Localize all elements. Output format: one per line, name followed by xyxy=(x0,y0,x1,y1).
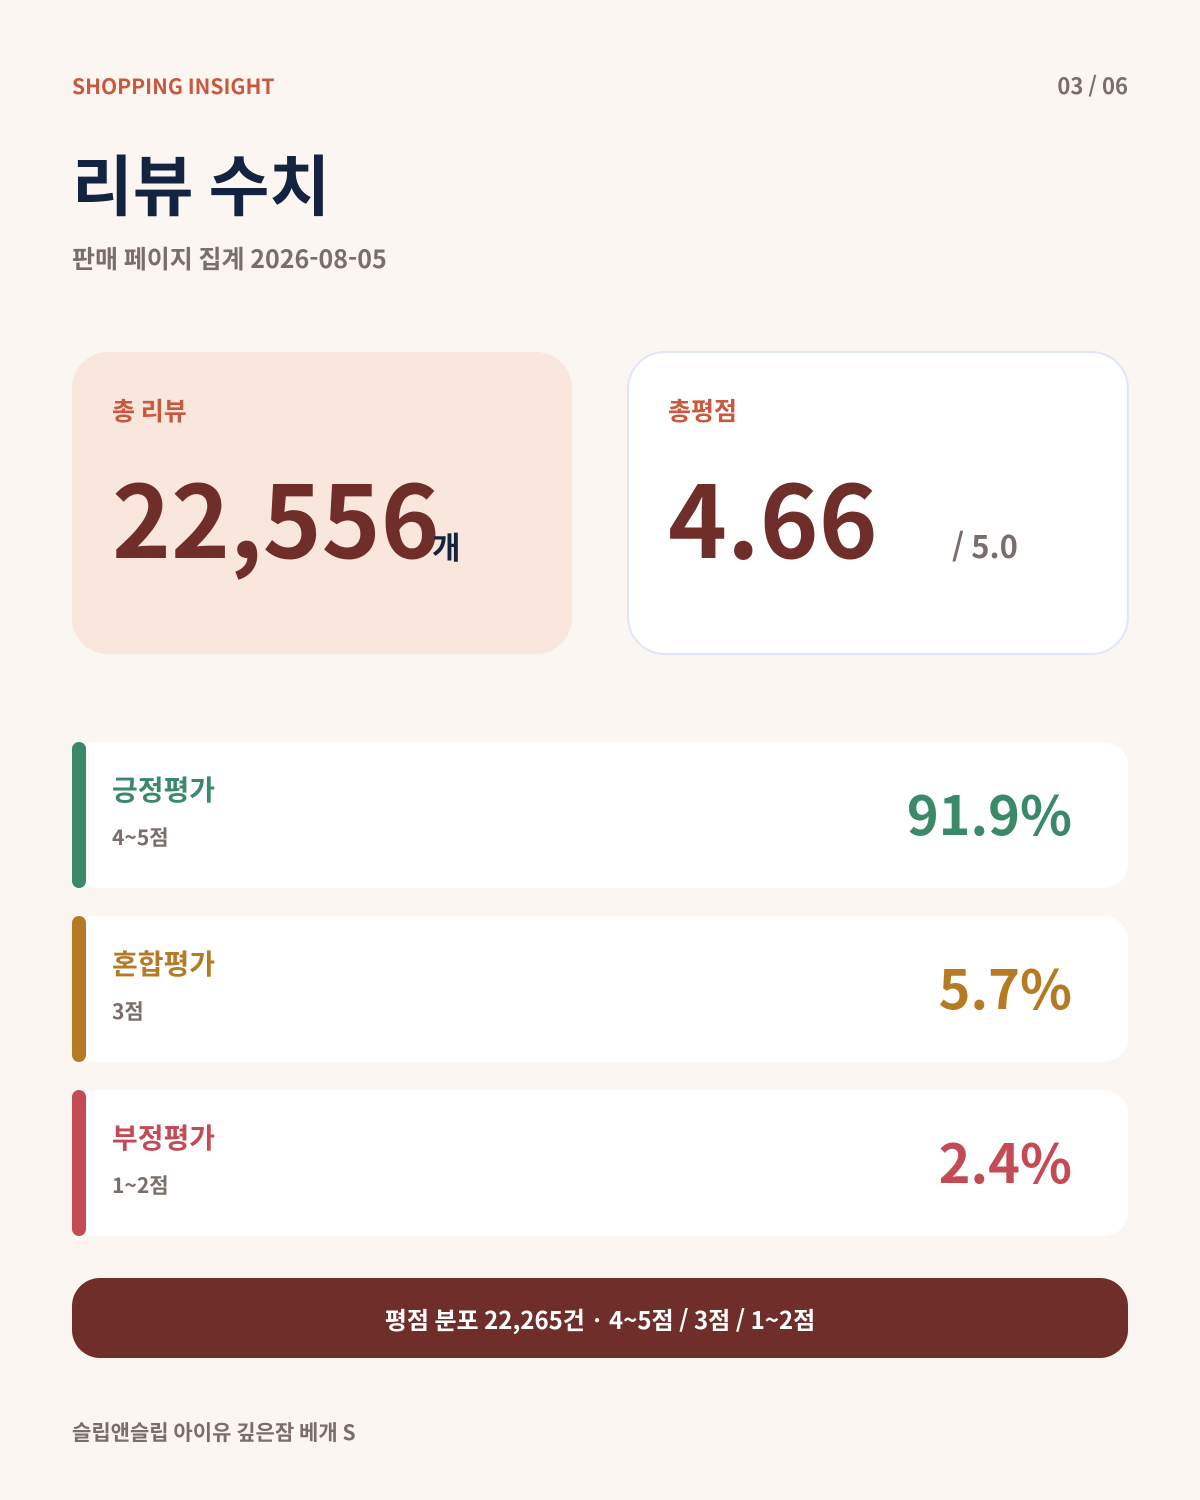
negative label: 부정평가 xyxy=(112,1117,215,1157)
total reviews label: 총 리뷰 xyxy=(112,392,187,428)
total reviews unit: 개 xyxy=(432,523,461,568)
positive percentage: 91.9% xyxy=(907,772,1072,851)
mixed label: 혼합평가 xyxy=(112,943,215,983)
callout: rating distribution xyxy=(72,1278,1128,1358)
callout: rating distribution: 평점 분포 22,265건ㆍ4~5점 / 3점 / 1~2점 xyxy=(385,1301,815,1336)
mixed range: 3점 xyxy=(112,996,144,1026)
positive accent bar xyxy=(72,742,86,888)
negative range: 1~2점 xyxy=(112,1170,169,1200)
page number: 03 / 06 xyxy=(1057,69,1128,101)
panel: total reviews xyxy=(72,352,572,654)
subtitle: 판매 페이지 집계 2026-08-05 xyxy=(72,240,387,276)
panel: negative reviews xyxy=(72,1090,1128,1236)
negative accent bar xyxy=(72,1090,86,1236)
positive range: 4~5점 xyxy=(112,822,169,852)
panel: overall rating xyxy=(627,351,1129,655)
panel: mixed reviews xyxy=(72,916,1128,1062)
overall rating scale: / 5.0 xyxy=(952,522,1018,567)
panel: positive reviews xyxy=(72,742,1128,888)
overall rating label: 총평점 xyxy=(668,392,737,428)
overall rating value: 4.66 xyxy=(668,442,878,587)
footer product name: 슬립앤슬립 아이유 깊은잠 베개 S xyxy=(72,1417,356,1447)
negative percentage: 2.4% xyxy=(939,1120,1072,1199)
mixed percentage: 5.7% xyxy=(939,946,1072,1025)
mixed accent bar xyxy=(72,916,86,1062)
title: 리뷰 수치 xyxy=(72,134,330,230)
positive label: 긍정평가 xyxy=(112,769,215,809)
eyebrow label: SHOPPING INSIGHT xyxy=(72,71,275,101)
total reviews value: 22,556 xyxy=(112,442,440,587)
